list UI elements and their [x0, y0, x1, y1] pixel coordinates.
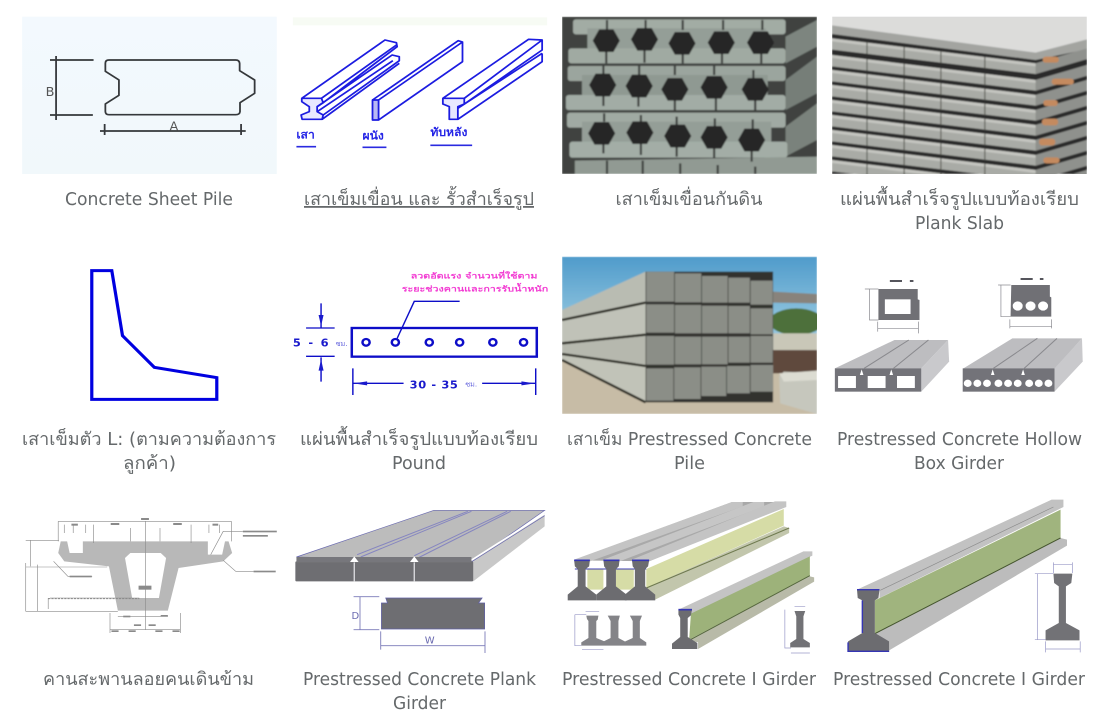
- diagram: sheet pile section: B: [46, 84, 54, 99]
- diagram: blue isometric sections: ทับหลัง: [430, 125, 468, 139]
- panel: Plank Slab photo: [832, 17, 1087, 234]
- diagram: plank girder deck and section: W: [425, 636, 435, 647]
- caption: two lines: เสาเข็มตัว L: (ตามความต้องการ: [22, 427, 276, 450]
- caption: two lines: [837, 429, 1082, 474]
- panel: pedestrian bridge beam: [26, 518, 277, 690]
- caption: Prestressed Concrete I Girder: [562, 669, 817, 690]
- panel: Concrete Sheet Pile: [22, 17, 277, 210]
- caption: two lines: [303, 669, 537, 714]
- caption: two lines: Prestressed Concrete Plank: [303, 669, 537, 690]
- caption: two lines: [22, 427, 276, 474]
- diagram: L section outline: [92, 271, 217, 399]
- diagram: hollow slab section with dimensions: ลวดอัดแรง จำนวนที่ใช้ตาม: [411, 270, 537, 280]
- panel: Plank Girder: [295, 510, 545, 714]
- caption: two lines: Pile: [674, 453, 705, 474]
- caption: two lines: Prestressed Concrete Hollow: [837, 429, 1082, 450]
- diagram: box girder types A and B: [835, 278, 1083, 392]
- panel: I Girder single: [833, 500, 1086, 690]
- diagram: hollow slab section with dimensions: 30 - 35: [410, 379, 458, 391]
- diagram: triple and single I girders: [568, 501, 814, 653]
- illustration: stacked square piles: [562, 257, 823, 414]
- diagram: blue isometric sections: ผนัง: [362, 129, 384, 142]
- diagram: plank girder deck and section: [295, 510, 545, 653]
- panel: retaining wall pile photo: [562, 17, 817, 210]
- caption: two lines: [567, 427, 812, 474]
- diagram: sheet pile section: A: [170, 119, 179, 134]
- panel: I Girder group: [562, 501, 817, 690]
- diagram: sheet pile section: [22, 17, 277, 174]
- caption: Concrete Sheet Pile: [65, 189, 233, 210]
- illustration: stacked I piles: [562, 17, 817, 174]
- caption: two lines: เสาเข็ม Prestressed Concrete: [567, 427, 812, 450]
- diagram: hollow slab section with dimensions: [293, 270, 548, 395]
- caption: เสาเข็มเขื่อน และ รั้วสำเร็จรูป: [304, 186, 534, 210]
- caption: two lines: Plank Slab: [915, 213, 1004, 234]
- diagram: hollow slab section with dimensions: 5 - 6: [293, 337, 329, 349]
- diagram: bridge girder cross-section: [26, 518, 277, 633]
- panel: Hollow Box Girder: [835, 278, 1083, 474]
- diagram: single I girder with section: [848, 500, 1080, 652]
- diagram: blue isometric sections: เสา: [296, 128, 315, 141]
- panel: L pile: [22, 271, 276, 474]
- panel: pile, wall and capping: [293, 17, 547, 210]
- panel: Prestressed Concrete Pile photo: [562, 257, 823, 474]
- caption: two lines: [300, 426, 538, 474]
- caption: two lines: [840, 186, 1079, 234]
- diagram: blue isometric sections: [293, 17, 547, 147]
- caption: two lines: แผ่นพื้นสำเร็จรูปแบบท้องเรียบ: [840, 186, 1079, 210]
- diagram: hollow slab section with dimensions: ซม.: [465, 381, 477, 389]
- caption: คานสะพานลอยคนเดินข้าม: [43, 669, 254, 690]
- caption: เสาเข็มเขื่อนกันดิน: [616, 186, 762, 210]
- caption: two lines: Box Girder: [914, 453, 1005, 474]
- illustration: stacked planks: [832, 16, 1087, 174]
- caption: two lines: Girder: [393, 693, 447, 714]
- diagram: hollow slab section with dimensions: ระยะช่วงคานและการรับน้ำหนัก: [402, 282, 548, 294]
- caption: Prestressed Concrete I Girder: [833, 669, 1086, 690]
- diagram: hollow slab section with dimensions: ซม.: [336, 340, 348, 348]
- diagram: plank girder deck and section: D: [352, 611, 359, 622]
- caption: two lines: Pound: [392, 453, 446, 474]
- panel: Pound slab: [293, 270, 548, 474]
- caption: two lines: แผ่นพื้นสำเร็จรูปแบบท้องเรียบ: [300, 426, 538, 450]
- caption: two lines: ลูกค้า): [123, 453, 176, 474]
